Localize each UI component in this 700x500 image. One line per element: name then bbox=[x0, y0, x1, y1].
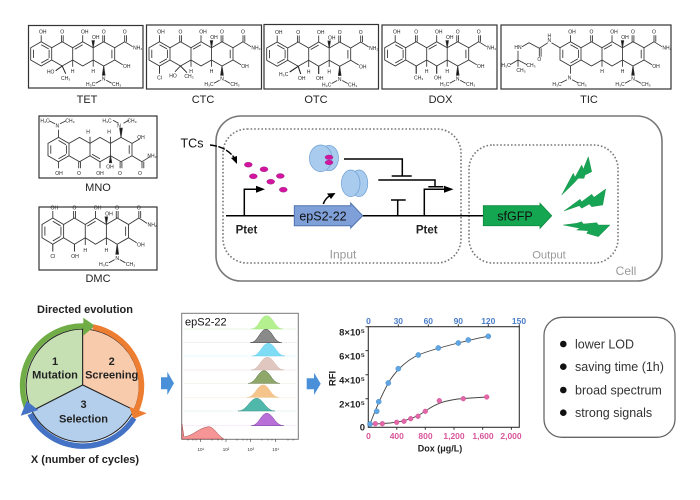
heading: directed evolution: Directed evolution bbox=[37, 304, 133, 316]
molecule: TET: CH₃ bbox=[112, 82, 121, 88]
molecule: DMC: CH₃ bbox=[126, 262, 135, 268]
chart: dose response bbox=[328, 316, 526, 454]
y axis labels: 2×10⁵ bbox=[339, 400, 365, 410]
curve: pink bbox=[368, 397, 487, 424]
label: MNO: MNO bbox=[85, 182, 111, 194]
panel: output: Output bbox=[532, 250, 567, 262]
promoter arrow: Ptet 1 bbox=[244, 186, 265, 216]
item: lower LOD: lower LOD bbox=[575, 338, 634, 352]
molecule: TIC: H bbox=[547, 34, 551, 40]
molecule: TIC: O bbox=[537, 57, 541, 63]
arrow: TCs entering bbox=[210, 145, 237, 164]
sector: screening bbox=[83, 329, 139, 410]
y axis labels: 4×10⁵ bbox=[339, 376, 365, 386]
top axis labels: 150 bbox=[512, 316, 526, 326]
molecule: CTC: OH bbox=[157, 30, 165, 36]
molecule: DMC: N bbox=[115, 256, 119, 262]
panel: advantages bbox=[544, 317, 675, 437]
molecule: OTC: H bbox=[307, 70, 311, 76]
molecule: DMC: O bbox=[137, 205, 141, 211]
molecule: TET: H bbox=[91, 69, 95, 75]
molecule: DOX: O bbox=[477, 30, 481, 36]
molecule: TIC: N bbox=[547, 38, 551, 44]
histogram row 1 bbox=[182, 316, 298, 329]
molecule: CTC: O bbox=[179, 30, 183, 36]
label: TCs: TCs bbox=[181, 136, 203, 150]
molecule: DMC: Cl bbox=[50, 254, 55, 260]
arrow: to dose response bbox=[307, 373, 321, 395]
points: blue bbox=[367, 334, 491, 427]
molecule: TET: H bbox=[71, 69, 75, 75]
label: selection: 3 bbox=[80, 399, 87, 411]
molecule: MNO: H₃C bbox=[102, 119, 112, 125]
x axis title: Dox (μg/L) bbox=[418, 444, 462, 454]
molecule: OTC: OH bbox=[275, 30, 283, 36]
molecule: TIC: CH₃ bbox=[641, 82, 651, 88]
bottom axis labels: 0 bbox=[366, 431, 371, 441]
molecule: DMC: O bbox=[115, 205, 119, 211]
molecule: DOX: OH bbox=[434, 76, 442, 82]
y axis title: RFI bbox=[328, 371, 339, 386]
x axis ticks bbox=[188, 439, 293, 442]
molecule: DMC: H₃C bbox=[99, 262, 109, 268]
gene: sfGFP: sfGFP bbox=[497, 209, 533, 223]
molecule: CTC: O bbox=[241, 30, 245, 36]
molecule: CTC: NH₂ bbox=[251, 46, 261, 52]
arc: green bbox=[23, 318, 95, 413]
molecule: OTC: O bbox=[338, 30, 342, 36]
gene: epS2-22 bbox=[294, 203, 363, 228]
label: DMC: DMC bbox=[85, 273, 111, 285]
histogram row 7 bbox=[182, 398, 298, 411]
molecule: OTC: O bbox=[296, 30, 300, 36]
label: DOX: DOX bbox=[429, 94, 453, 106]
arc: blue bbox=[21, 401, 134, 446]
histogram row 9 bbox=[182, 424, 224, 439]
molecule: TET: HO bbox=[47, 70, 55, 76]
molecule: CTC: OH bbox=[210, 35, 218, 41]
bottom axis labels: 1,600 bbox=[472, 431, 494, 441]
molecule: OTC: OH bbox=[359, 64, 367, 70]
molecule: TIC bbox=[501, 25, 672, 89]
molecule: CTC: H bbox=[189, 69, 193, 75]
molecule: TIC: HN bbox=[514, 45, 522, 51]
molecule: MNO: O bbox=[77, 171, 81, 177]
sector: mutation bbox=[26, 329, 83, 411]
molecule: DOX: CH₃ bbox=[414, 76, 423, 82]
molecule: DOX: O bbox=[414, 30, 418, 36]
molecule: CTC: N bbox=[220, 77, 224, 83]
molecule: CTC: H₃C bbox=[204, 82, 214, 88]
bottom axis labels: 2,000 bbox=[500, 431, 522, 441]
molecule: TIC: H bbox=[621, 69, 625, 75]
top axis labels: 120 bbox=[481, 316, 496, 326]
molecule: MNO: OH bbox=[106, 165, 114, 171]
molecule: TIC: N bbox=[568, 76, 572, 82]
histogram row 3 bbox=[182, 343, 298, 356]
molecule: DOX: OH bbox=[435, 30, 443, 36]
molecule: DMC: H bbox=[105, 248, 108, 254]
molecule: TIC: N bbox=[631, 77, 635, 83]
TC molecules bbox=[244, 162, 287, 192]
molecule: TIC: H bbox=[600, 69, 604, 75]
gene: sfGFP bbox=[483, 203, 552, 228]
bottom axis labels: 1,200 bbox=[443, 431, 465, 441]
molecule: DMC: OH bbox=[105, 211, 113, 217]
molecule: TET: OH bbox=[39, 30, 47, 36]
arrow: to flow cytometry bbox=[161, 372, 174, 395]
molecule: DOX: H bbox=[445, 69, 449, 75]
molecule: DOX: CH₃ bbox=[466, 82, 475, 88]
molecule: TET: O bbox=[123, 30, 127, 36]
molecule: DMC: OH bbox=[137, 243, 145, 249]
molecule: TET: N bbox=[102, 77, 106, 83]
molecule: DOX bbox=[382, 25, 497, 89]
molecule: TIC: NH₂ bbox=[662, 46, 672, 52]
molecule: TIC: CH₃ bbox=[516, 68, 526, 74]
item: strong signals: strong signals bbox=[575, 406, 652, 420]
molecule: TET: OH bbox=[81, 30, 89, 36]
molecule: DMC: OH bbox=[71, 254, 79, 260]
molecule: TET: NH₂ bbox=[133, 46, 142, 52]
molecule: TET: OH bbox=[123, 64, 131, 70]
molecule: OTC: N bbox=[338, 77, 342, 83]
molecule: MNO: CH₃ bbox=[127, 119, 137, 125]
histogram row 6 bbox=[182, 385, 298, 397]
label: number of cycles: X (number of cycles) bbox=[31, 454, 139, 466]
molecule: TIC: CH₃ bbox=[577, 82, 587, 88]
molecule: DOX: NH₂ bbox=[487, 46, 496, 52]
molecule: OTC: O bbox=[359, 30, 363, 36]
panel: input: Input bbox=[330, 248, 357, 262]
panel: cell bbox=[216, 116, 662, 281]
molecule: TIC: H₃C bbox=[552, 82, 562, 88]
molecule: CTC: Cl bbox=[157, 76, 162, 82]
item: broad spectrum: broad spectrum bbox=[575, 384, 662, 398]
molecule: CTC: OH bbox=[241, 64, 249, 70]
x axis labels: 10³ bbox=[247, 447, 254, 452]
bottom axis labels: 800 bbox=[418, 431, 433, 441]
molecule: MNO: H₃C bbox=[40, 119, 50, 125]
molecule: TET: H₃C bbox=[86, 82, 96, 88]
panel: output bbox=[469, 145, 618, 263]
molecule: MNO: N bbox=[55, 124, 59, 130]
molecule: MNO: N bbox=[117, 124, 121, 130]
icon: fluorescence bolts bbox=[562, 157, 610, 237]
molecule: DOX: OH bbox=[446, 35, 454, 41]
molecule: MNO: OH bbox=[96, 171, 104, 177]
molecule: MNO: NH₂ bbox=[147, 154, 157, 160]
molecule: CTC: CH₃ bbox=[184, 74, 194, 80]
label: OTC: OTC bbox=[304, 94, 328, 106]
molecule: MNO bbox=[39, 116, 157, 178]
label: Ptet 1: Ptet bbox=[236, 224, 258, 236]
molecule: TIC: H₃C bbox=[615, 82, 625, 88]
molecule: OTC: H₃C bbox=[279, 72, 289, 78]
inhibition line 2 bbox=[378, 180, 443, 187]
y axis labels: 0 bbox=[360, 422, 365, 434]
molecule: DOX: N bbox=[456, 77, 460, 83]
histogram row 8 bbox=[182, 413, 298, 426]
molecule: TIC: CH₃ bbox=[526, 63, 536, 69]
molecule: CTC: O bbox=[220, 30, 224, 36]
x axis labels: 10⁴ bbox=[272, 447, 279, 452]
label: mutation: 1 bbox=[52, 356, 58, 368]
molecule: DOX: OH bbox=[477, 64, 485, 70]
chart: flow cytometry histograms bbox=[182, 313, 298, 452]
molecule: OTC: OH bbox=[316, 76, 324, 82]
molecule: TET: O bbox=[102, 30, 106, 36]
panel: cell: Cell bbox=[616, 264, 636, 278]
label: epS2-22: epS2-22 bbox=[185, 316, 227, 328]
y axis labels: 8×10⁵ bbox=[339, 328, 365, 338]
molecule: OTC: H bbox=[327, 70, 331, 76]
molecule: TET: OH bbox=[92, 35, 100, 41]
diagram: directed evolution cycle bbox=[21, 318, 147, 446]
molecule: DMC: H bbox=[83, 248, 87, 254]
molecule: DMC: OH bbox=[51, 205, 58, 211]
histogram row 5 bbox=[182, 371, 298, 383]
points: pink bbox=[373, 395, 489, 426]
molecule: MNO: H bbox=[107, 130, 111, 136]
label: TET: TET bbox=[77, 94, 98, 106]
molecule: TET: O bbox=[60, 30, 64, 36]
y axis labels: 6×10⁵ bbox=[339, 352, 365, 362]
molecule: TIC: O bbox=[631, 30, 635, 36]
molecule: OTC: H₃C bbox=[322, 82, 332, 88]
top axis labels: 30 bbox=[394, 316, 403, 326]
arrow: translation bbox=[323, 193, 336, 204]
histogram row 4 bbox=[182, 357, 298, 370]
molecule: TIC: OH bbox=[610, 30, 618, 36]
molecule: CTC bbox=[146, 25, 262, 89]
molecule: TIC: O bbox=[590, 30, 594, 36]
molecule: OTC: OH bbox=[317, 30, 325, 36]
molecule: CTC: HO bbox=[169, 74, 177, 80]
molecule: OTC bbox=[264, 24, 378, 89]
molecule: MNO: O bbox=[118, 171, 122, 177]
molecule: TIC: O bbox=[652, 30, 656, 36]
molecule: OTC: CH₃ bbox=[348, 82, 357, 88]
label: mutation: Mutation bbox=[32, 369, 78, 381]
x axis labels: 10¹ bbox=[197, 447, 204, 452]
molecule: DMC: OH bbox=[94, 205, 102, 211]
label: screening: Screening bbox=[85, 369, 138, 381]
molecule: TIC: OH bbox=[621, 35, 629, 41]
top axis labels: 90 bbox=[454, 316, 463, 326]
molecule: MNO: CH₃ bbox=[65, 119, 75, 125]
molecule: MNO: H bbox=[86, 130, 90, 136]
molecule: OTC: OH bbox=[328, 36, 336, 42]
curve: blue bbox=[368, 336, 488, 427]
label: screening: 2 bbox=[109, 356, 115, 368]
sector: selection bbox=[32, 385, 134, 442]
molecule: MNO: OH bbox=[55, 171, 63, 177]
promoter arrow: Ptet 2 bbox=[424, 186, 454, 216]
top axis labels: 60 bbox=[424, 316, 433, 326]
bottom axis labels: 400 bbox=[390, 431, 404, 441]
molecule: TIC: OH bbox=[568, 30, 576, 36]
label: selection: Selection bbox=[59, 413, 108, 425]
x axis labels: 10² bbox=[223, 447, 230, 452]
molecule: TET bbox=[28, 26, 143, 88]
histogram row 2 bbox=[182, 329, 298, 343]
molecule: CTC: OH bbox=[199, 30, 207, 36]
molecule: OTC: OH bbox=[298, 76, 306, 82]
protein: free dimer bbox=[341, 170, 368, 197]
molecule: MNO: O bbox=[138, 171, 142, 177]
molecule: TIC: H₃C bbox=[501, 63, 511, 69]
molecule: TET: CH₃ bbox=[61, 76, 70, 82]
panel: input bbox=[223, 129, 461, 263]
axis ticks bbox=[366, 324, 519, 430]
item: saving time: saving time (1h) bbox=[575, 360, 664, 374]
molecule: OTC: NH₂ bbox=[369, 46, 378, 52]
top axis labels: 0 bbox=[366, 316, 371, 326]
gene: epS2-22: epS2-22 bbox=[299, 209, 347, 223]
molecule: DMC: NH₂ bbox=[147, 223, 157, 229]
molecule: DOX: H₃C bbox=[440, 82, 450, 88]
molecule: TIC: OH bbox=[652, 64, 660, 70]
molecule: CTC: H bbox=[210, 69, 214, 75]
protein: dimer bound to TCs bbox=[309, 145, 338, 172]
molecule: DOX: OH bbox=[393, 30, 401, 36]
molecule: CTC: CH₃ bbox=[230, 82, 240, 88]
molecule: DMC: O bbox=[72, 205, 76, 211]
axes frame bbox=[368, 327, 519, 427]
label: Ptet 2: Ptet bbox=[416, 224, 438, 236]
DNA line bbox=[226, 215, 484, 217]
molecule: DOX: H bbox=[425, 69, 429, 75]
molecule: DOX: O bbox=[456, 30, 460, 36]
label: CTC: CTC bbox=[192, 94, 214, 106]
arc: orange bbox=[93, 327, 147, 419]
label: TIC: TIC bbox=[580, 94, 598, 106]
inhibition line 1 bbox=[344, 159, 412, 176]
molecule: MNO: OH bbox=[137, 135, 145, 141]
molecule: DMC bbox=[39, 205, 157, 270]
inhibition on DNA bbox=[391, 200, 406, 216]
